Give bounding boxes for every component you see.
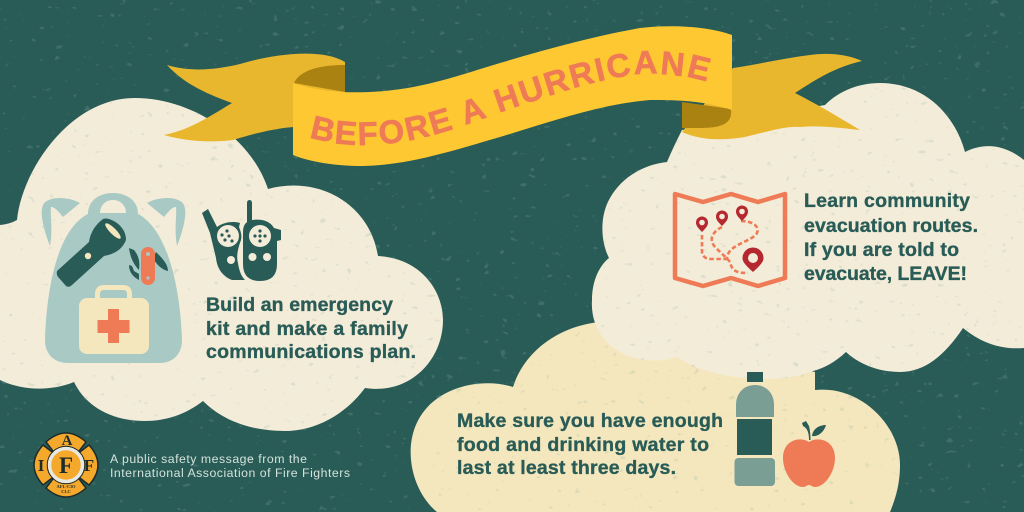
banner centre ribbon	[293, 26, 732, 166]
icon: water bottle	[734, 372, 775, 486]
banner	[164, 26, 862, 166]
banner left tail	[164, 54, 345, 141]
logo: IAFF maltese cross: AFL-CIO	[56, 484, 76, 489]
text: evacuation routes: evacuate, LEAVE!	[804, 263, 967, 285]
text: food and water: food and drinking water to	[457, 434, 709, 456]
text: public safety message	[110, 452, 350, 480]
logo: IAFF maltese cross: F	[84, 456, 94, 475]
banner left fold	[294, 65, 345, 92]
logo: IAFF maltese cross	[34, 433, 98, 497]
icon: pocket knife	[129, 247, 168, 285]
text: evacuation routes	[804, 190, 978, 285]
text: public safety message: A public safety message from the	[110, 452, 307, 466]
logo: IAFF maltese cross: I	[38, 456, 45, 475]
banner right fold	[682, 102, 731, 128]
icon: walkie talkies	[202, 200, 281, 281]
panel: food and water cloud	[411, 322, 900, 512]
icon: apple	[783, 421, 835, 487]
text: evacuation routes: If you are told to	[804, 239, 959, 261]
icon: evacuation map	[675, 194, 785, 286]
logo: IAFF maltese cross: CLC	[61, 489, 71, 494]
banner right tail	[682, 54, 862, 139]
map dashed routes	[702, 221, 758, 273]
text: food and water: last at least three days.	[457, 457, 676, 479]
icon: backpack	[42, 193, 185, 363]
text: emergency kit: Build an emergency	[206, 294, 393, 316]
text: emergency kit: communications plan.	[206, 341, 416, 363]
text: public safety message: International Association of Fire Fighters	[110, 466, 350, 480]
backpack straps	[42, 198, 185, 246]
panel: emergency kit cloud	[0, 98, 443, 431]
left radio	[202, 209, 245, 280]
text: emergency kit	[206, 294, 416, 363]
icon: first aid kit	[79, 288, 149, 354]
banner title: BEFORE A HURRICANE	[310, 50, 711, 146]
text: emergency kit: kit and make a family	[206, 318, 408, 340]
text: evacuation routes: Learn community	[804, 190, 970, 212]
logo: IAFF maltese cross: A	[62, 433, 73, 449]
logo: IAFF maltese cross: F	[59, 453, 73, 478]
icon: flashlight	[57, 218, 126, 287]
backpack handle hole	[100, 200, 126, 213]
panel: evacuation routes cloud	[592, 83, 1024, 379]
text: evacuation routes: evacuation routes.	[804, 215, 978, 237]
map outline	[675, 194, 785, 286]
map pins	[696, 206, 764, 272]
backpack body	[45, 193, 182, 363]
right radio	[243, 200, 281, 281]
text: food and water	[457, 410, 723, 479]
text: food and water: Make sure you have enough	[457, 410, 723, 432]
